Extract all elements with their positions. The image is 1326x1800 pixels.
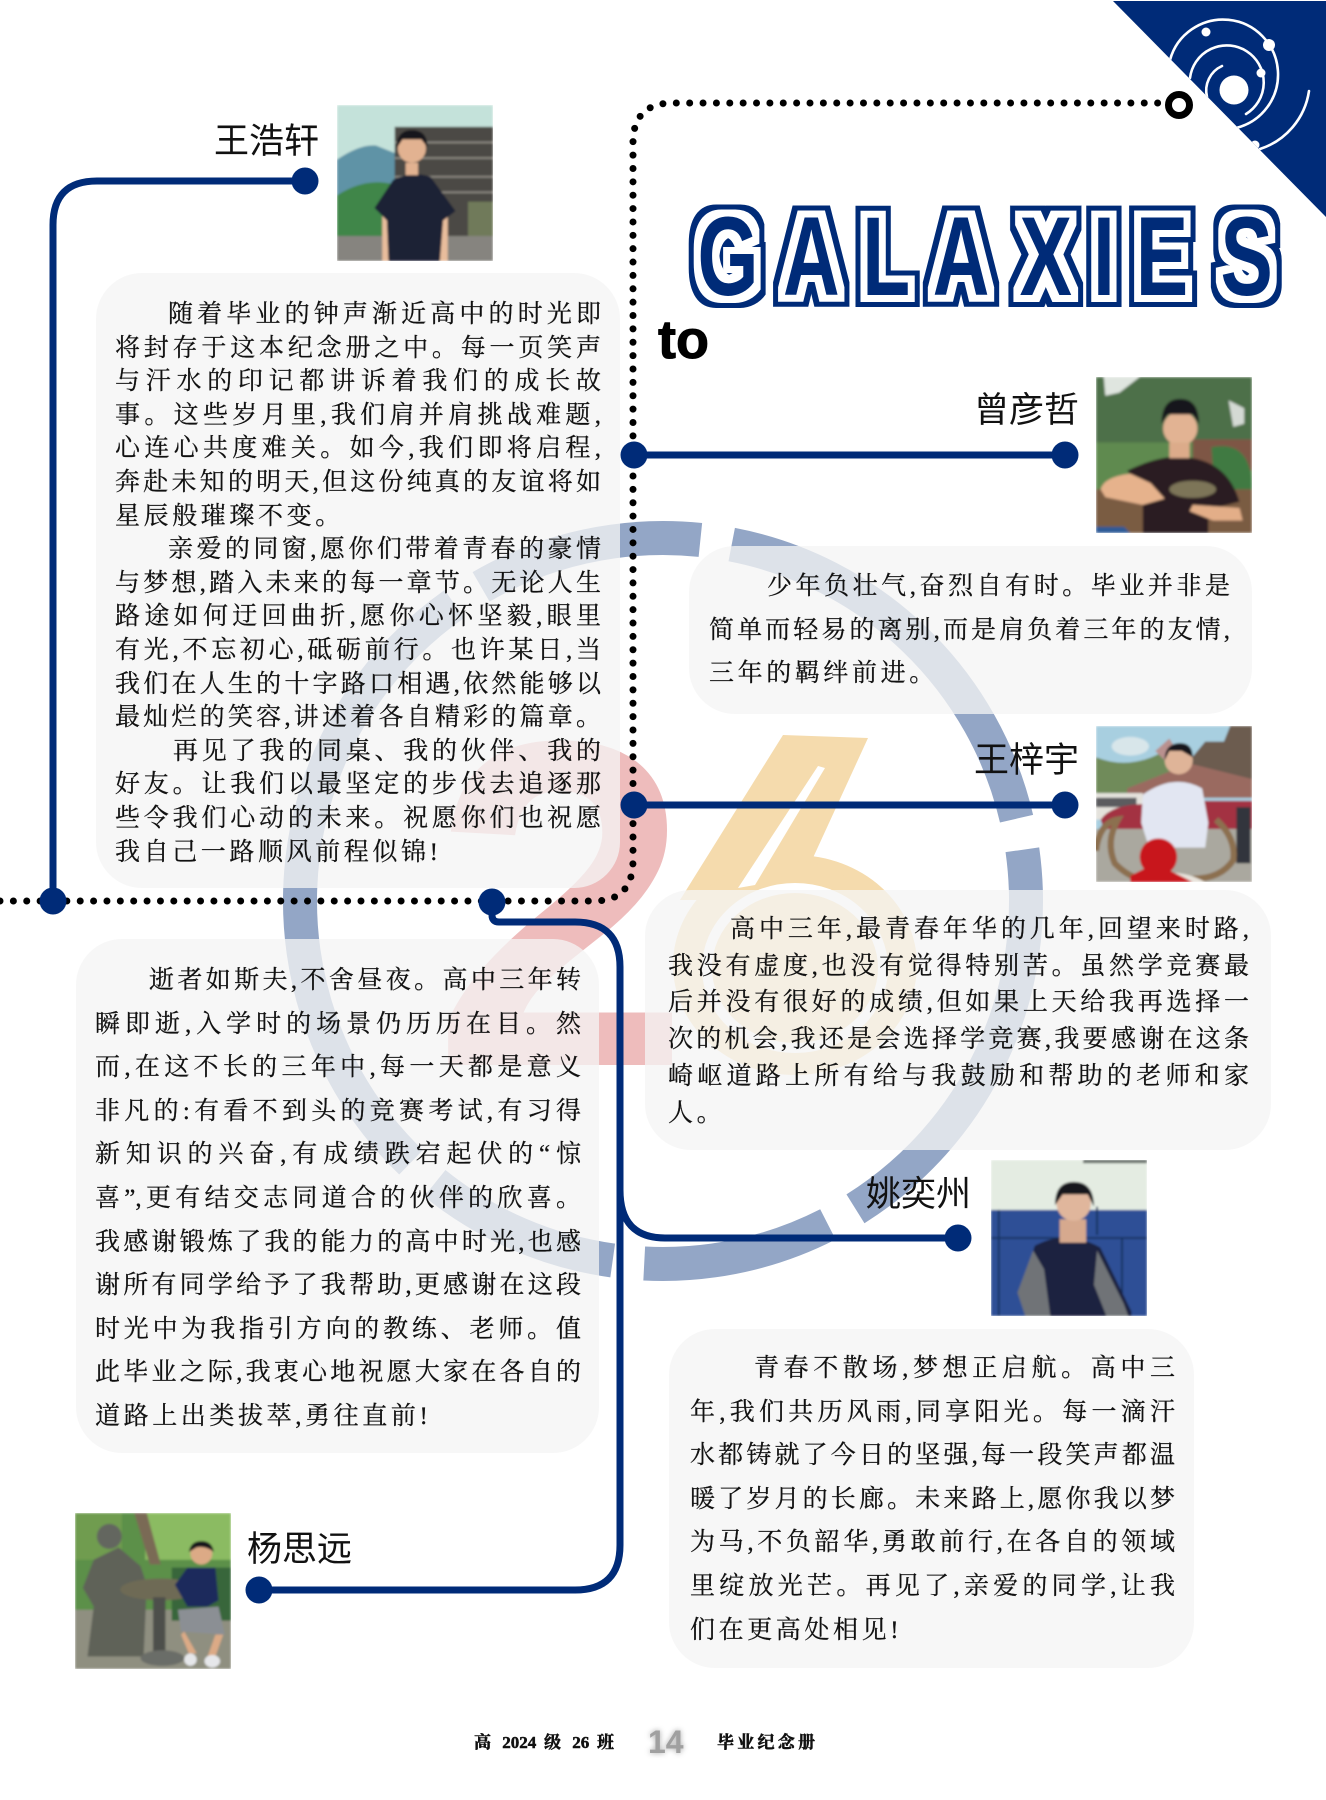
text: 王梓宇 message: 高中三年,最青春年华的几年,回望来时路, [730, 916, 1249, 943]
text: 王浩轩 message: 星辰般璀璨不变。 [115, 503, 344, 530]
text: 杨思远 message: 非凡的:有看不到头的竞赛考试,有习得 [95, 1098, 581, 1125]
numeral 2: 2 [432, 644, 691, 1164]
text: 姚奕州 message: 们在更高处相见! [690, 1617, 902, 1644]
text: 杨思远 message: 我感谢锻炼了我的能力的高中时光,也感 [95, 1229, 581, 1256]
text: 姚奕州 message: 里绽放光芒。再见了,亲爱的同学,让我 [690, 1573, 1175, 1600]
connector: 王浩轩 [40, 168, 318, 914]
photo: 杨思远 beside a bronze statue [75, 1513, 231, 1669]
heading: to: to [658, 310, 709, 370]
text: 王浩轩 message: 路途如何迂回曲折,愿你心怀坚毅,眼里 [115, 603, 601, 630]
ring end marker [1168, 94, 1190, 116]
name: 姚奕州: 姚奕州 [866, 1175, 971, 1214]
text: 王浩轩 message: 奔赴未知的明天,但这份纯真的友谊将如 [115, 469, 601, 496]
connector: 王梓宇 [620, 792, 1078, 818]
text: 王梓宇 message: 后并没有很好的成绩,但如果上天给我再选择一 [668, 989, 1249, 1016]
text: 王梓宇 message: 我没有虚度,也没有觉得特别苦。虽然学竞赛最 [668, 953, 1249, 980]
footer: page number: 14 [648, 1724, 684, 1760]
title: GALAXIES: GALAXIES [698, 194, 1273, 319]
text: 王浩轩 message: 好友。让我们以最坚定的步伐去追逐那 [115, 771, 601, 798]
text: 杨思远 message: 新知识的兴奋,有成绩跌宕起伏的“惊 [95, 1141, 581, 1168]
text: 王浩轩 message: 有光,不忘初心,砥砺前行。也许某日,当 [115, 637, 601, 664]
panel: 曾彦哲 message [689, 546, 1252, 714]
text: 王浩轩 message: 再见了我的同桌、我的伙伴、我的 [173, 738, 601, 765]
text: 王浩轩 message: 与梦想,踏入未来的每一章节。无论人生 [115, 570, 601, 597]
photo: 王浩轩 at the Great Wall [337, 105, 493, 261]
text: 杨思远 message: 谢所有同学给予了我帮助,更感谢在这段 [95, 1272, 581, 1299]
text: 杨思远 message: 时光中为我指引方向的教练、老师。值 [95, 1316, 581, 1343]
footer: class label: 高 2024 级 26 班 [474, 1733, 614, 1752]
text: 王浩轩 message: 我们在人生的十字路口相遇,依然能够以 [115, 671, 601, 698]
text: 曾彦哲 message [709, 572, 1230, 687]
text: 王浩轩 message: 将封存于这本纪念册之中。每一页笑声 [115, 335, 601, 362]
text: 杨思远 message: 此毕业之际,我衷心地祝愿大家在各自的 [95, 1359, 581, 1386]
photo: 曾彦哲 holding a fish [1096, 377, 1252, 533]
text: 王浩轩 message: 与汗水的印记都讲诉着我们的成长故 [115, 368, 601, 395]
text: 姚奕州 message: 年,我们共历风雨,同享阳光。每一滴汗 [690, 1399, 1175, 1426]
text: 王梓宇 message: 次的机会,我还是会选择学竞赛,我要感谢在这条 [668, 1026, 1249, 1053]
text: 王浩轩 message: 些令我们心动的未来。祝愿你们也祝愿 [115, 805, 601, 832]
text: 王浩轩 message: 随着毕业的钟声渐近高中的时光即 [168, 301, 601, 328]
panel: 姚奕州 message [669, 1329, 1194, 1668]
text: 王浩轩 message: 心连心共度难关。如今,我们即将启程, [115, 435, 601, 462]
text: 姚奕州 message: 为马,不负韶华,勇敢前行,在各自的领域 [690, 1529, 1175, 1556]
text: 王浩轩 message [115, 300, 601, 866]
connector: 曾彦哲 [620, 442, 1078, 468]
name: 王浩轩: 王浩轩 [214, 122, 319, 161]
name: 王梓宇: 王梓宇 [974, 741, 1079, 780]
name: 曾彦哲: 曾彦哲 [974, 391, 1079, 430]
text: 杨思远 message: 瞬即逝,入学时的场景仍历历在目。然 [95, 1011, 581, 1038]
text: 王浩轩 message: 事。这些岁月里,我们肩并肩挑战难题, [115, 402, 601, 429]
text: 王梓宇 message [668, 915, 1249, 1127]
text: 姚奕州 message: 水都铸就了今日的坚强,每一段笑声都温 [690, 1442, 1175, 1469]
text: 杨思远 message: 喜”,更有结交志同道合的伙伴的欣喜。 [95, 1185, 581, 1212]
dotted timeline [0, 103, 1170, 901]
text: 姚奕州 message: 青春不散场,梦想正启航。高中三 [754, 1355, 1175, 1382]
photo: 王梓宇 on a yak [1096, 726, 1252, 882]
text: 杨思远 message: 而,在这不长的三年中,每一天都是意义 [95, 1054, 581, 1081]
text: 王浩轩 message: 我自己一路顺风前程似锦! [115, 838, 442, 866]
footer: yearbook label: 毕业纪念册 [717, 1733, 815, 1752]
text: 王梓宇 message: 崎岖道路上所有给与我鼓励和帮助的老师和家 [668, 1063, 1249, 1090]
text: 姚奕州 message: 暖了岁月的长廊。未来路上,愿你我以梦 [690, 1486, 1175, 1513]
panel: 杨思远 message [76, 939, 599, 1453]
text: 曾彦哲 message: 简单而轻易的离别,而是肩负着三年的友情, [709, 617, 1230, 644]
text: 王浩轩 message: 亲爱的同窗,愿你们带着青春的豪情 [168, 536, 601, 563]
corner triangle with solar system icon [1113, 1, 1326, 217]
text: 姚奕州 message [690, 1354, 1175, 1644]
text: 杨思远 message: 逝者如斯夫,不舍昼夜。高中三年转 [149, 967, 581, 994]
panel: 王浩轩 message [96, 273, 620, 888]
numeral 6: 6 [712, 799, 879, 1135]
numeral 6 [673, 735, 917, 1135]
text: 曾彦哲 message: 三年的羁绊前进。 [709, 660, 938, 687]
name: 杨思远: 杨思远 [247, 1530, 352, 1569]
connector: 姚奕州 and 杨思远 branch [246, 888, 972, 1604]
panel: 王梓宇 message [645, 890, 1271, 1150]
text: 王浩轩 message: 最灿烂的笑容,讲述着各自精彩的篇章。 [115, 704, 601, 731]
text: 曾彦哲 message: 少年负壮气,奋烈自有时。毕业并非是 [767, 573, 1230, 600]
text: 杨思远 message [95, 966, 581, 1430]
photo: 姚奕州 on a blue sofa [991, 1160, 1147, 1316]
segmented ring [253, 491, 1073, 1311]
text: 杨思远 message: 道路上出类拔萃,勇往直前! [95, 1403, 431, 1430]
text: 王梓宇 message: 人。 [668, 1100, 725, 1127]
